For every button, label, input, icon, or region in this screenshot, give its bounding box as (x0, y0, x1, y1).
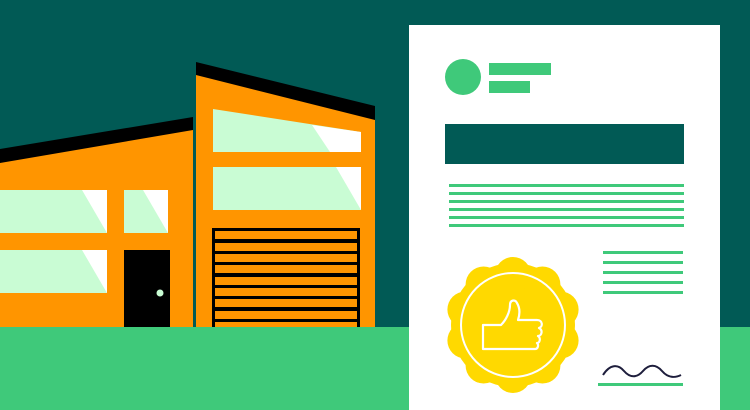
header avatar (445, 59, 481, 95)
signature (603, 366, 681, 377)
door (124, 250, 170, 327)
right building (196, 62, 375, 327)
ground (0, 327, 750, 410)
left building (0, 117, 193, 327)
document (409, 25, 720, 410)
title bar (445, 124, 684, 164)
text lines (449, 184, 684, 227)
seal (447, 257, 579, 393)
garage door (212, 228, 360, 327)
side lines (603, 251, 683, 294)
